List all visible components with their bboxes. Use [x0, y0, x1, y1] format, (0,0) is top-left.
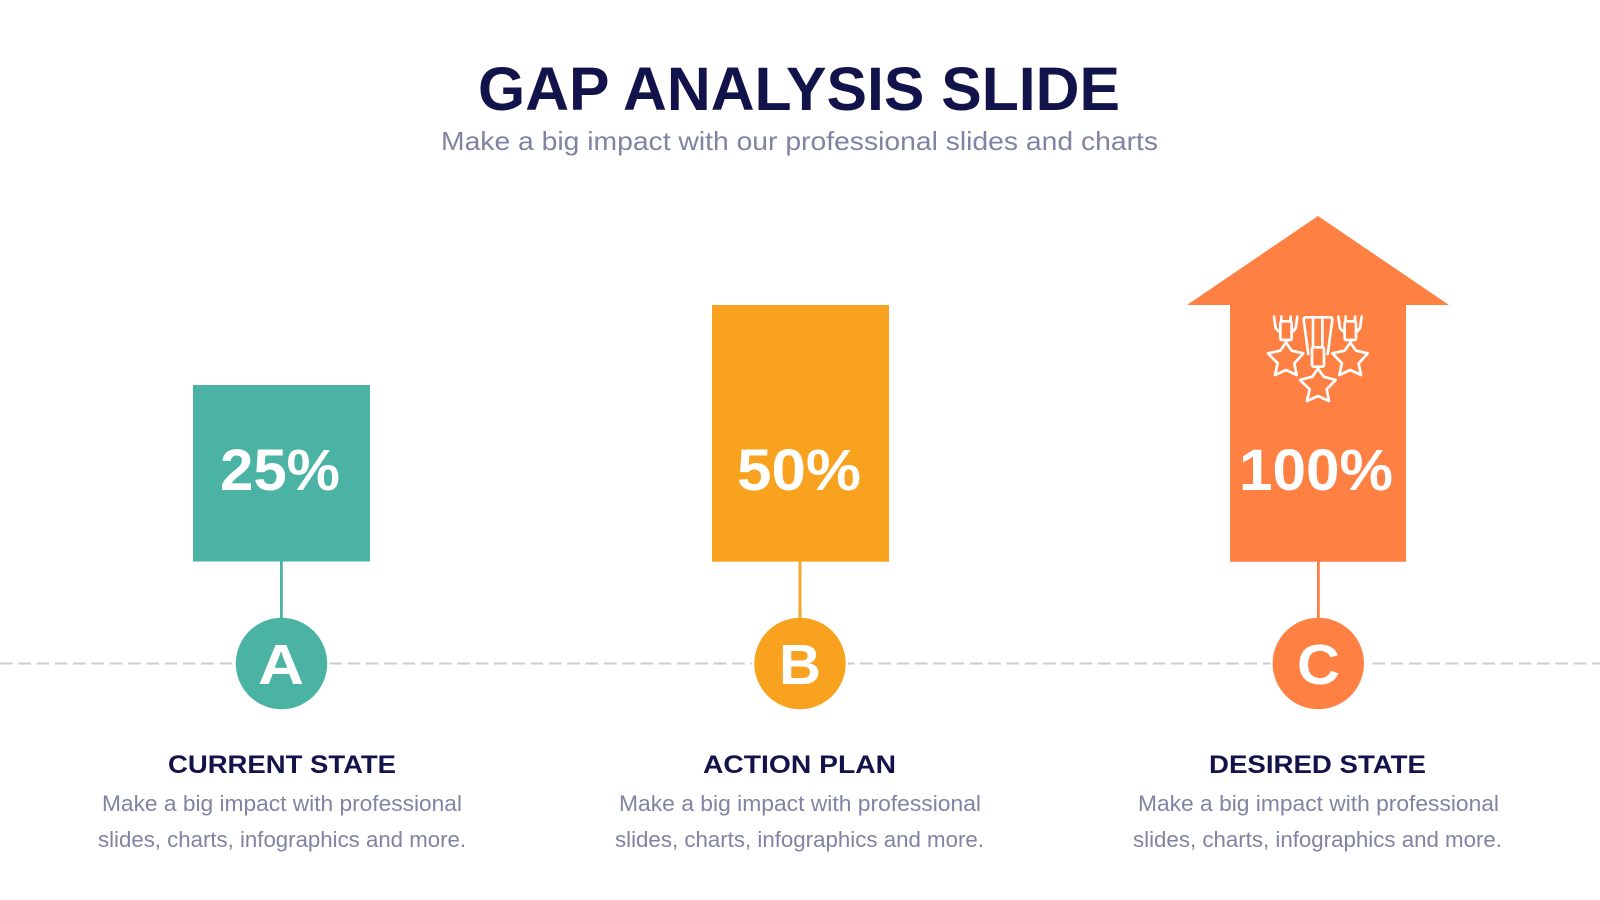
description: desired state	[1133, 791, 1502, 852]
connector A	[280, 560, 283, 620]
description: action plan: slides, charts, infographics and more.	[615, 827, 984, 852]
connector B	[799, 560, 801, 620]
description: current state	[98, 791, 466, 852]
badge A	[234, 616, 330, 712]
badge C: C	[1297, 633, 1340, 697]
arrow: 100%: 100%	[1239, 438, 1393, 503]
heading: current state: CURRENT STATE	[168, 751, 396, 779]
description: action plan	[615, 791, 984, 852]
bar: 25%: 25%	[220, 438, 340, 503]
connector C	[1317, 560, 1320, 620]
bar: 25%	[193, 385, 370, 562]
description: action plan: Make a big impact with professional	[619, 791, 981, 816]
badge A: A	[258, 633, 304, 697]
description: current state: slides, charts, infographics and more.	[98, 827, 466, 852]
column: action plan	[615, 305, 984, 852]
heading: desired state: DESIRED STATE	[1209, 751, 1426, 779]
title: GAP ANALYSIS SLIDE	[478, 55, 1120, 123]
bar: 50%: 50%	[737, 438, 861, 503]
heading: action plan: ACTION PLAN	[703, 751, 896, 779]
description: current state: Make a big impact with professional	[102, 791, 462, 816]
column: current state	[98, 385, 466, 852]
column: desired state	[1133, 216, 1502, 852]
badge B: B	[779, 633, 821, 697]
icon: medals with stars	[1268, 317, 1368, 401]
description: desired state: Make a big impact with professional	[1138, 791, 1499, 816]
description: desired state: slides, charts, infographics and more.	[1133, 827, 1502, 852]
bar: 50%	[712, 305, 889, 562]
badge C	[1270, 616, 1366, 712]
badge B	[752, 616, 848, 712]
arrow: 100%	[1187, 216, 1449, 562]
subtitle: Make a big impact with our professional slides and charts	[441, 126, 1158, 156]
